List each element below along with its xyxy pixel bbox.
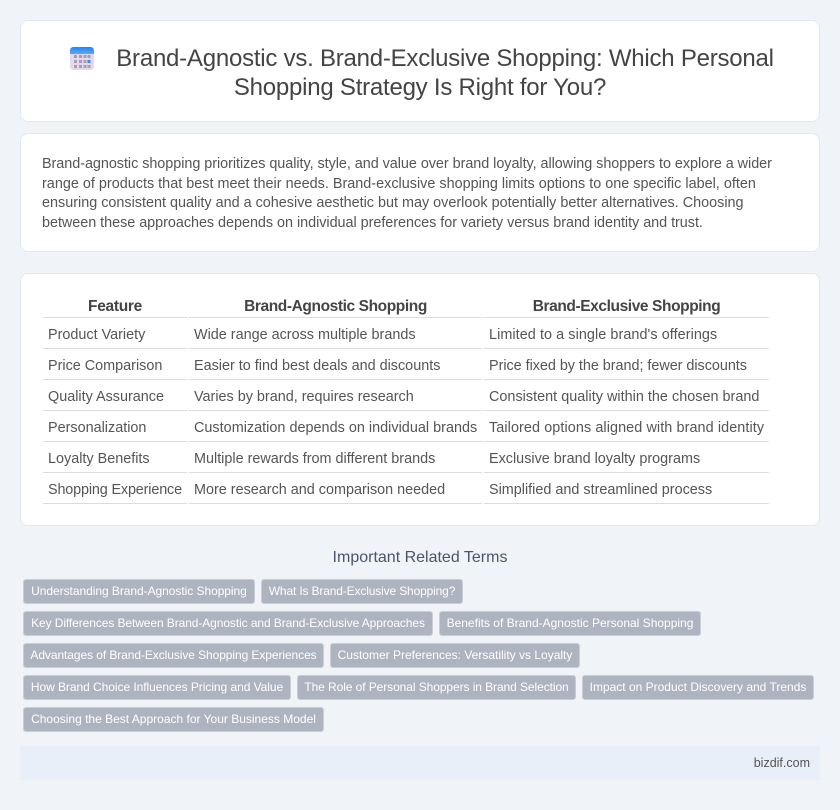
tag [439,611,701,636]
row: Price Comparison: Price fixed by the brand; fewer discounts [489,358,747,374]
comparison table [43,298,769,504]
row: Loyalty Benefits: Loyalty Benefits [48,451,150,467]
icon: calendar [70,47,94,70]
row: Loyalty Benefits: Multiple rewards from different brands [194,451,435,467]
tag: Understanding Brand-Agnostic Shopping [31,584,247,598]
header: Feature: Feature [88,298,142,315]
tag [23,675,291,700]
tag [23,707,324,732]
row: Shopping Experience: Shopping Experience [48,482,182,498]
row: Loyalty Benefits: Exclusive brand loyalty programs [489,451,700,467]
row: Personalization: Personalization [48,420,146,436]
tag [261,579,463,604]
row: Quality Assurance [48,389,759,405]
row: Personalization [48,420,764,436]
heading: Important Related Terms: Important Related Terms [333,549,507,566]
title: Shopping Strategy Is Right for You? [234,74,606,101]
panel: comparison table [20,273,820,526]
intro text: Brand-agnostic shopping prioritizes quality, style, and value over brand loyalty, allowing shoppers to explore a wider [42,156,772,172]
row: Quality Assurance: Consistent quality within the chosen brand [489,389,759,405]
tag: The Role of Personal Shoppers in Brand Selection [304,680,569,694]
intro text: ensuring consistent quality and a cohesive aesthetic but may overlook potentially better alternatives. Choosing [42,195,744,211]
tag: Impact on Product Discovery and Trends [590,680,806,694]
tag [582,675,814,700]
panel: introduction [20,133,820,252]
footer bar [20,746,820,780]
tag [23,611,433,636]
related terms tags [23,579,814,732]
tag [330,643,580,668]
row: Shopping Experience [48,482,712,498]
row: Quality Assurance: Quality Assurance [48,389,164,405]
tag: Customer Preferences: Versatility vs Loyalty [338,648,572,662]
tag [297,675,576,700]
row: Price Comparison: Easier to find best deals and discounts [194,358,440,374]
footer text: bizdif.com [754,756,810,770]
header: Brand-Agnostic Shopping: Brand-Agnostic Shopping [244,298,427,315]
row: Price Comparison: Price Comparison [48,358,162,374]
row: Personalization: Tailored options aligned with brand identity [489,420,764,436]
row: Shopping Experience: Simplified and streamlined process [489,482,712,498]
tag: Advantages of Brand-Exclusive Shopping Experiences [30,648,317,662]
tag: How Brand Choice Influences Pricing and Value [31,680,283,694]
row: Shopping Experience: More research and comparison needed [194,482,445,498]
tag: What Is Brand-Exclusive Shopping? [269,584,455,598]
row: Personalization: Customization depends on individual brands [194,420,477,436]
tag: Key Differences Between Brand-Agnostic and Brand-Exclusive Approaches [31,616,425,630]
intro text: range of products that best meet their needs. Brand-exclusive shopping limits options to one specific label, often [42,176,756,192]
row: Product Variety: Product Variety [48,327,145,343]
header panel [20,20,820,122]
tag [23,579,255,604]
intro text: between these approaches depends on individual preferences for variety versus brand identity and trust. [42,215,703,231]
tag: Benefits of Brand-Agnostic Personal Shopping [447,616,693,630]
row: Product Variety: Limited to a single brand's offerings [489,327,717,343]
tag: Choosing the Best Approach for Your Business Model [31,712,316,726]
title [116,45,774,101]
tag [23,643,324,668]
intro text [42,156,772,231]
row: Product Variety: Wide range across multiple brands [194,327,416,343]
header: Brand-Exclusive Shopping: Brand-Exclusive Shopping [533,298,720,315]
row: Loyalty Benefits [48,451,700,467]
row: Price Comparison [48,358,747,374]
row: Product Variety [48,327,717,343]
row: Quality Assurance: Varies by brand, requires research [194,389,414,405]
title: Brand-Agnostic vs. Brand-Exclusive Shopping: Which Personal [116,45,774,72]
